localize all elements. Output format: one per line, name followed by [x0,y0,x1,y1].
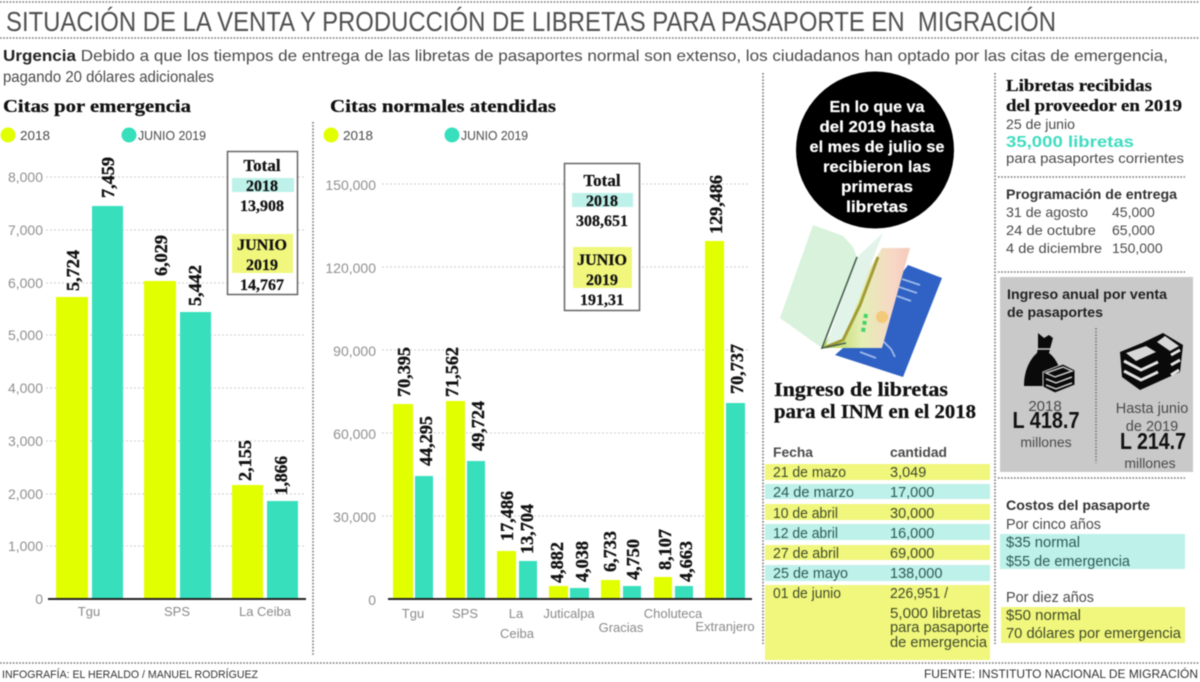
table: ingreso de libretas: 5,000 libretas [890,606,981,622]
panel: programación de entrega: 31 de agosto [1006,204,1088,220]
legend: JUNIO 2019 [138,128,206,143]
panel: programación de entrega: 65,000 [1112,222,1155,238]
panel: libretas recibidas: del proveedor en 2019 [1006,96,1182,115]
table: ingreso de libretas: 01 de junio [773,586,841,602]
bar chart: citas normales atendidas: 150,000 [325,177,376,193]
title: SITUACIÓN DE LA VENTA Y PRODUCCIÓN DE LIBRETAS PARA PASAPORTE EN MIGRACIÓN [6,6,1056,37]
bar chart: citas normales atendidas: Juticalpa [543,606,595,621]
bar chart: citas por emergencia: 5,442 [185,265,205,306]
table: ingreso de libretas: 21 de mazo [773,465,846,481]
intro text: Urgencia Debido a que los tiempos de entrega de las libretas de pasaportes normal son extenso, los ciudadanos han optado por las citas de emergencia, [3,48,1168,65]
callout: black circle: del 2019 hasta [820,119,935,136]
panel: ingreso anual: L 418.7 [1012,407,1080,433]
panel: libretas recibidas: para pasaportes corrientes [1006,150,1184,166]
bar chart: citas por emergencia: 7,459 [98,157,118,198]
panel: ingreso anual: millones [1124,455,1176,471]
panel: costos del pasaporte: $55 de emergencia [1006,554,1131,570]
totals box: citas por emergencia: JUNIO [237,237,287,254]
bar chart: citas por emergencia: 1,866 [271,456,291,495]
callout: black circle: el mes de julio se [810,139,945,156]
bar chart: citas normales atendidas: 4,663 [676,541,696,582]
bar chart: citas por emergencia: 2,155 [235,440,255,481]
table: ingreso de libretas: 24 de marzo [773,485,854,501]
panel: programación de entrega: 45,000 [1112,204,1155,220]
intro text [3,48,1168,86]
bar chart: citas normales atendidas: 44,295 [416,416,436,466]
totals box: citas por emergencia: 2018 [246,178,278,195]
bar chart: citas normales atendidas: 6,733 [600,531,620,572]
bar chart: citas por emergencia: 5,724 [63,250,83,291]
panel: costos del pasaporte: Por diez años [1006,590,1094,606]
bar chart: citas normales atendidas: Gracias [599,620,644,635]
table: ingreso de libretas: 16,000 [890,526,934,542]
totals box: citas por emergencia [228,152,298,294]
legend: JUNIO 2019 [461,128,528,143]
bar chart: citas por emergencia: 4,000 [8,380,43,396]
panel: libretas recibidas: Libretas recibidas [1006,76,1152,95]
bar chart: citas por emergencia: 5,000 [8,327,43,343]
panel: ingreso anual: de 2019 [1126,419,1178,435]
totals box: citas por emergencia: 13,908 [240,198,284,215]
bar chart: citas normales atendidas: 49,724 [468,401,488,451]
table: ingreso de libretas: 27 de abril [773,546,839,562]
credit: INFOGRAFÍA: EL HERALDO / MANUEL RODRÍGUEZ [2,668,258,681]
legend: 2018 [343,128,373,143]
panel: ingreso anual: L 214.7 [1120,428,1186,454]
heading: ingreso de libretas: Ingreso de libretas [774,380,948,401]
totals box: citas normales: Total [583,171,621,190]
heading: ingreso de libretas [774,380,976,423]
bar chart: citas por emergencia: 2,000 [8,486,43,502]
bar chart: citas normales atendidas: 4,882 [547,542,567,583]
panel: costos del pasaporte: 70 dólares por emergencia [1006,626,1182,642]
totals box: citas normales [564,164,640,310]
icon: passports [780,225,942,377]
bar chart: citas normales atendidas: La [509,606,524,621]
callout: black circle: recibieron las [823,159,931,176]
panel: citas por emergencia [0,96,306,619]
bar chart: citas por emergencia: SPS [164,604,190,619]
table: ingreso de libretas: 17,000 [890,485,934,501]
bar chart: citas normales atendidas: 71,562 [442,347,462,397]
bar chart: citas normales atendidas: 60,000 [333,426,376,442]
panel: costos del pasaporte: $35 normal [1006,535,1080,551]
panel: programación de entrega: 4 de diciembre [1006,240,1102,256]
totals box: citas normales: 191,31 [580,292,624,309]
callout: black circle: libretas [846,199,908,216]
totals box: citas normales: 2019 [586,272,618,289]
bar chart: citas por emergencia [8,157,306,619]
panel: ingreso anual: 2018 [1028,398,1062,415]
panel: libretas recibidas: 25 de junio [1006,116,1075,132]
panel: ingreso de libretas [765,380,990,660]
panel: costos del pasaporte: Costos del pasaporte [1006,497,1150,513]
panel: ingreso anual: millones [1020,434,1072,450]
totals box: citas normales: 308,651 [576,213,628,230]
table: ingreso de libretas: 10 de abril [773,506,838,522]
table: ingreso de libretas: 30,000 [890,506,934,522]
totals box: citas por emergencia: 14,767 [240,277,284,294]
panel: ingreso anual: Ingreso anual por venta [1007,286,1167,302]
table: ingreso de libretas: 69,000 [890,546,934,562]
bar chart: citas normales atendidas: Choluteca [644,606,703,621]
panel: programación de entrega: 24 de octubre [1006,222,1096,238]
panel: ingreso anual [1000,277,1193,472]
totals box: citas por emergencia: Total [243,156,281,175]
bar chart: citas normales atendidas: 4,038 [572,541,592,582]
heading: citas normales atendidas: Citas normales atendidas [330,96,556,116]
totals box: citas normales: JUNIO [577,252,627,269]
legend [324,128,528,143]
table: ingreso de libretas: 226,951 / [890,586,949,602]
callout: black circle: En lo que va [830,99,925,116]
bar chart: citas normales atendidas: 70,395 [394,347,414,397]
panel: costos del pasaporte: Por cinco años [1006,517,1101,533]
bar chart: citas normales atendidas: Ceiba [500,626,535,641]
table: ingreso de libretas: cantidad [890,444,947,460]
bar chart: citas normales atendidas: 8,107 [655,529,675,570]
icon: money bag [1024,333,1075,393]
icon: money stack [1120,333,1183,390]
table: ingreso de libretas [765,444,990,660]
bar chart: citas normales atendidas: 90,000 [333,343,376,359]
heading: citas por emergencia: Citas por emergencia [3,96,191,116]
bar chart: citas por emergencia: La Ceiba [239,604,292,619]
panel: ingreso anual: de pasaportes [1007,304,1103,320]
bar chart: citas normales atendidas: 4,750 [623,539,643,580]
table: ingreso de libretas: 25 de mayo [773,566,848,582]
bar chart: citas por emergencia: 8,000 [8,169,43,185]
bar chart: citas por emergencia: 3,000 [8,433,43,449]
panel: libretas recibidas [1006,76,1184,166]
legend [0,128,206,143]
callout: black circle: primeras [841,179,913,196]
table: ingreso de libretas: para pasaporte [890,620,989,636]
bar chart: citas normales atendidas: 70,737 [727,344,747,394]
panel: programación de entrega: Programación de entrega [1006,186,1177,202]
bar chart: citas por emergencia: 6,000 [8,275,43,291]
table: ingreso de libretas: Fecha [773,444,813,460]
bar chart: citas normales atendidas: Extranjero [695,619,755,634]
panel: programación de entrega [1006,186,1177,256]
bar chart: citas normales atendidas: 13,704 [517,504,537,554]
bar chart: citas normales atendidas: 129,486 [706,175,726,234]
table: ingreso de libretas: 12 de abril [773,526,838,542]
table: ingreso de libretas: de emergencia [890,635,988,651]
panel: citas normales atendidas [324,96,755,641]
panel: costos del pasaporte [1000,497,1185,643]
panel: costos del pasaporte: $50 normal [1006,608,1081,624]
bar chart: citas por emergencia: 6,029 [151,235,171,276]
totals box: citas por emergencia: 2019 [246,257,278,274]
bar chart: citas por emergencia: Tgu [78,604,100,619]
bar chart: citas normales atendidas: SPS [452,606,478,621]
bar chart: citas normales atendidas: 0 [368,592,376,608]
bar chart: citas normales atendidas: 17,486 [497,491,517,541]
panel: libretas recibidas: 35,000 libretas [1006,134,1134,151]
panel: ingreso anual: Hasta junio [1116,401,1188,417]
legend: 2018 [20,128,50,143]
callout: black circle [796,72,954,228]
intro text: pagando 20 dólares adicionales [3,69,214,86]
bar chart: citas por emergencia: 1,000 [8,538,43,554]
panel: programación de entrega: 150,000 [1112,240,1163,256]
heading: ingreso de libretas: para el INM en el 2018 [774,402,976,423]
bar chart: citas por emergencia: 7,000 [8,222,43,238]
source: FUENTE: INSTITUTO NACIONAL DE MIGRACIÓN [924,666,1198,681]
bar chart: citas por emergencia: 0 [35,591,43,607]
totals box: citas normales: 2018 [586,193,618,210]
bar chart: citas normales atendidas: 120,000 [325,260,376,276]
bar chart: citas normales atendidas: Tgu [402,606,424,621]
bar chart: citas normales atendidas [325,175,755,641]
table: ingreso de libretas: 3,049 [890,465,926,481]
bar chart: citas normales atendidas: 30,000 [333,509,376,525]
table: ingreso de libretas: 138,000 [890,566,942,582]
